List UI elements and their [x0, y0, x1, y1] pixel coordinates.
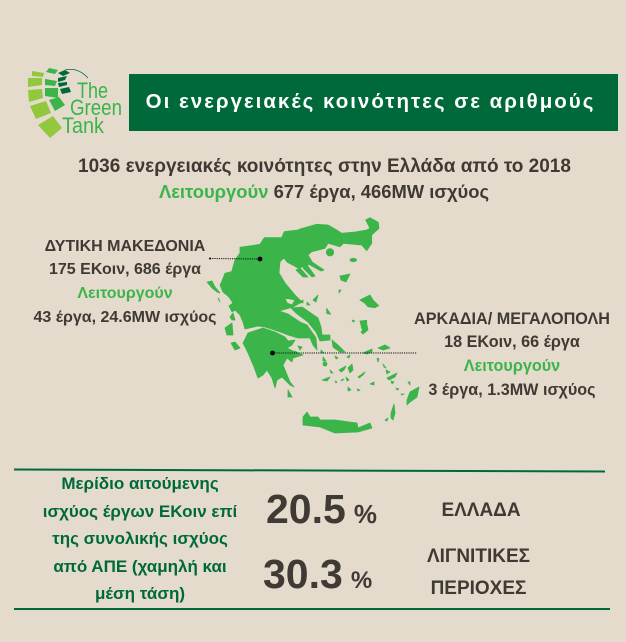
Saronic islands	[298, 346, 302, 350]
logo wordmark: Tank	[62, 113, 105, 138]
Ionian islands	[207, 281, 220, 293]
Chios	[360, 320, 367, 333]
share description	[43, 474, 237, 603]
label: Greece: ΕΛΛΑΔΑ	[441, 500, 521, 520]
share description: της συνολικής ισχύος	[52, 529, 228, 548]
title: Οι ενεργειακές κοινότητες σε αριθμούς	[146, 90, 595, 113]
summary line 1: 1036 ενεργειακές κοινότητες στην Ελλάδα από το 2018	[78, 156, 571, 176]
label: lignite regions	[427, 546, 530, 599]
Thasos	[326, 249, 334, 256]
summary line 2: Λειτουργούν 677 έργα, 466MW ισχύος	[159, 181, 489, 202]
callout: Arcadia / Megalopoli: 3 έργα, 1.3MW ισχύος	[428, 381, 596, 399]
logo wordmark: The	[77, 78, 108, 103]
share description: Μερίδιο αιτούμενης	[61, 474, 219, 493]
share description: μέση τάση)	[95, 584, 185, 603]
callout: Arcadia / Megalopoli: Λειτουργούν	[464, 357, 560, 375]
share description: ισχύος έργων ΕΚοιν επί	[43, 502, 237, 520]
Crete	[303, 412, 372, 433]
bottom divider	[14, 608, 610, 610]
Limnos	[340, 274, 350, 282]
share description: από ΑΠΕ (χαμηλή και	[53, 556, 227, 576]
Rhodes	[407, 387, 419, 405]
Lesvos	[360, 295, 379, 308]
mainland	[220, 218, 379, 350]
callout: Arcadia / Megalopoli: 18 ΕΚοιν, 66 έργα	[444, 333, 580, 351]
callout: Arcadia / Megalopoli	[414, 310, 610, 399]
logo wordmark: Green	[70, 95, 122, 120]
Sporades and Skyros	[300, 300, 303, 303]
Peloponnese	[243, 328, 303, 388]
label: lignite regions: ΠΕΡΙΟΧΕΣ	[431, 578, 526, 599]
leader line: Arcadia	[270, 351, 417, 355]
Evia	[291, 307, 330, 341]
callout: Western Macedonia: 175 ΕΚοιν, 686 έργα	[49, 261, 201, 278]
callout: Arcadia / Megalopoli: ΑΡΚΑΔΙΑ/ ΜΕΓΑΛΟΠΟΛΗ	[414, 310, 610, 328]
callout: Western Macedonia	[33, 238, 216, 326]
label: lignite regions: ΛΙΓΝΙΤΙΚΕΣ	[427, 546, 530, 567]
Dodecanese	[377, 358, 379, 362]
Kythira	[288, 390, 292, 397]
stat: lignite regions 30.3%: 30.3 %	[263, 551, 372, 597]
callout: Western Macedonia: ΔΥΤΙΚΗ ΜΑΚΕΔΟΝΙΑ	[45, 238, 205, 254]
logo: The Green Tank	[28, 68, 122, 138]
title banner	[129, 74, 618, 131]
Cyclades and north Aegean	[332, 340, 345, 352]
Samothraki	[350, 258, 357, 262]
Chalkidiki fingers	[296, 268, 308, 277]
callout: Western Macedonia: Λειτουργούν	[77, 285, 173, 302]
logo wordmark	[62, 78, 122, 138]
stat: Greece 20.5%: 20.5 %	[266, 486, 377, 532]
leader line: Western Macedonia	[209, 257, 262, 261]
callout: Western Macedonia: 43 έργα, 24.6MW ισχύος	[33, 309, 216, 326]
